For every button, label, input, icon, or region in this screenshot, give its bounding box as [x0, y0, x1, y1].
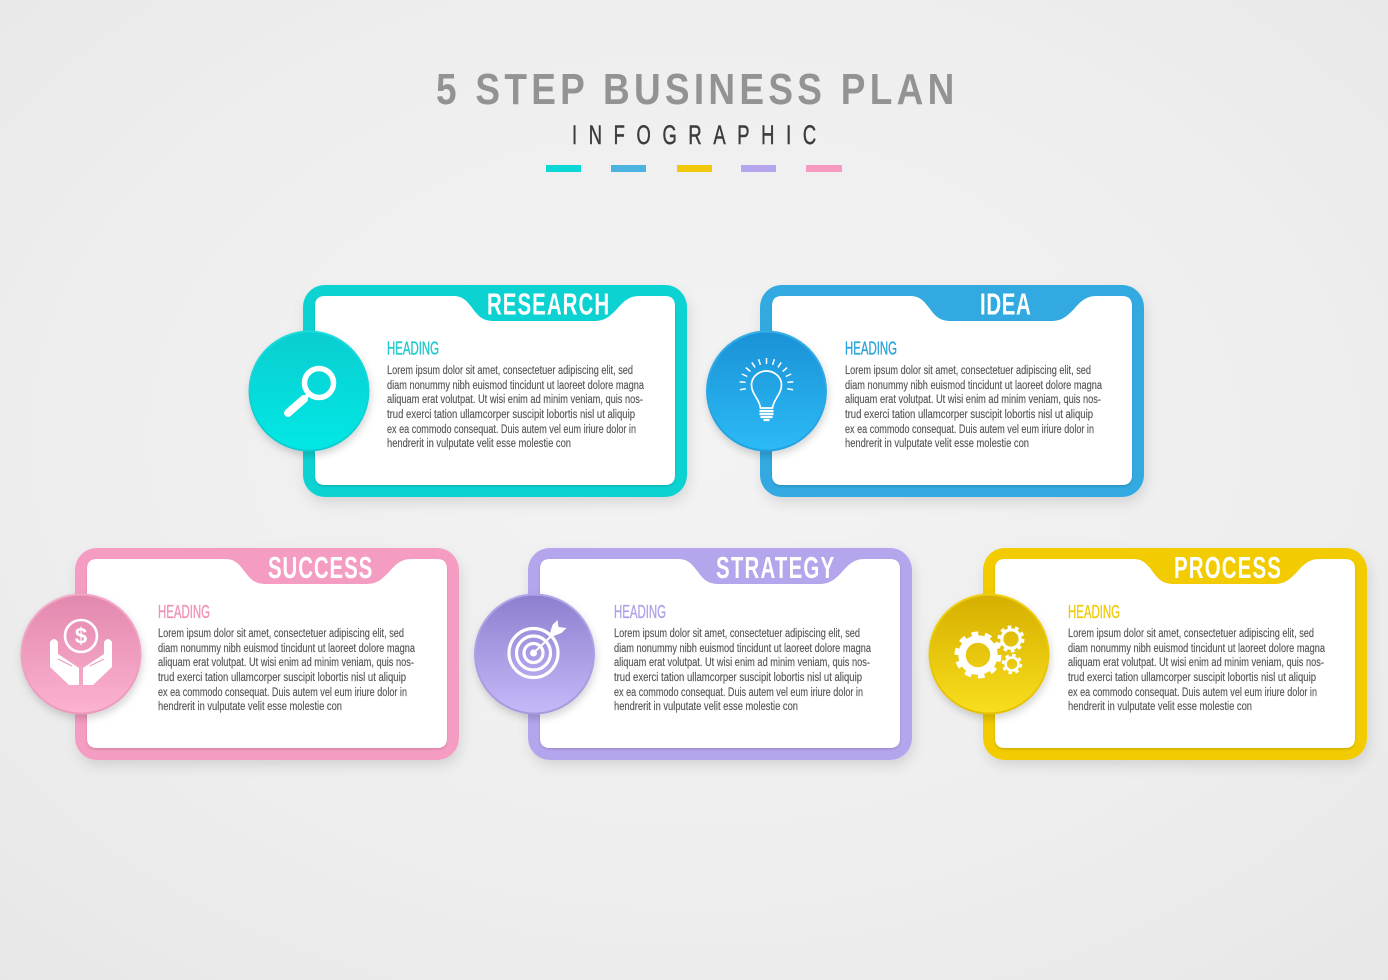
icon badge: magnifier	[248, 330, 370, 452]
icon badge: hands holding coin: $	[75, 624, 87, 648]
body text: hendrerit in vulputate velit esse molestie con	[614, 701, 798, 713]
body text: ex ea commodo consequat. Duis autem vel eum iriure dolor in	[845, 424, 1094, 436]
body text: ex ea commodo consequat. Duis autem vel eum iriure dolor in	[158, 687, 407, 699]
body text: aliquam erat volutpat. Ut wisi enim ad minim veniam, quis nos-	[614, 657, 870, 669]
heading: HEADING	[387, 338, 439, 358]
body text: Lorem ipsum dolor sit amet, consectetuer adipiscing elit, sed	[614, 628, 860, 640]
body text	[1068, 628, 1325, 713]
card frame	[983, 548, 1367, 760]
icon badge: hands holding coin	[20, 594, 142, 714]
heading: HEADING	[845, 338, 897, 358]
card white body	[772, 296, 1132, 485]
title: 5 STEP BUSINESS PLAN	[436, 64, 954, 114]
tab label: RESEARCH	[487, 286, 609, 322]
body text: trud exerci tation ullamcorper suscipit lobortis nisl ut aliquip	[845, 409, 1093, 421]
panel: success	[20, 548, 459, 760]
body text: trud exerci tation ullamcorper suscipit lobortis nisl ut aliquip	[614, 672, 862, 684]
body text: diam nonummy nibh euismod tincidunt ut laoreet dolore magna	[614, 643, 871, 655]
card frame	[75, 548, 459, 760]
card frame	[528, 548, 912, 760]
body text: Lorem ipsum dolor sit amet, consectetuer adipiscing elit, sed	[845, 365, 1091, 377]
heading: HEADING	[158, 602, 210, 622]
body text	[614, 628, 871, 713]
body text	[387, 365, 644, 450]
tab label: SUCCESS	[268, 550, 372, 585]
body text: trud exerci tation ullamcorper suscipit lobortis nisl ut aliquip	[387, 409, 635, 421]
tab label: STRATEGY	[716, 550, 835, 585]
panel: strategy	[474, 548, 912, 760]
card white body	[540, 559, 900, 748]
body text: ex ea commodo consequat. Duis autem vel eum iriure dolor in	[387, 424, 636, 436]
body text: hendrerit in vulputate velit esse molestie con	[1068, 701, 1252, 713]
card frame	[760, 285, 1144, 497]
panel: research	[248, 285, 687, 497]
panel: process	[928, 548, 1367, 760]
body text: trud exerci tation ullamcorper suscipit lobortis nisl ut aliquip	[158, 672, 406, 684]
tab label: IDEA	[980, 286, 1031, 322]
body text	[158, 628, 415, 713]
body text: aliquam erat volutpat. Ut wisi enim ad minim veniam, quis nos-	[158, 657, 414, 669]
icon badge: light bulb	[706, 330, 827, 452]
card white body	[87, 559, 447, 748]
body text: diam nonummy nibh euismod tincidunt ut laoreet dolore magna	[387, 380, 644, 392]
icon badge: gears	[928, 594, 1050, 714]
body text: aliquam erat volutpat. Ut wisi enim ad minim veniam, quis nos-	[1068, 657, 1324, 669]
card white body	[995, 559, 1355, 748]
body text: diam nonummy nibh euismod tincidunt ut laoreet dolore magna	[158, 643, 415, 655]
subtitle: INFOGRAPHIC	[572, 119, 816, 150]
body text: hendrerit in vulputate velit esse molestie con	[845, 438, 1029, 450]
body text: hendrerit in vulputate velit esse molestie con	[387, 438, 571, 450]
body text: diam nonummy nibh euismod tincidunt ut laoreet dolore magna	[845, 380, 1102, 392]
tab label: PROCESS	[1174, 550, 1281, 585]
body text: aliquam erat volutpat. Ut wisi enim ad minim veniam, quis nos-	[387, 394, 643, 406]
panel: idea	[706, 285, 1144, 497]
body text: Lorem ipsum dolor sit amet, consectetuer adipiscing elit, sed	[1068, 628, 1314, 640]
body text: aliquam erat volutpat. Ut wisi enim ad minim veniam, quis nos-	[845, 394, 1101, 406]
heading: HEADING	[1068, 602, 1120, 622]
body text	[845, 365, 1102, 450]
card white body	[315, 296, 675, 485]
body text: Lorem ipsum dolor sit amet, consectetuer adipiscing elit, sed	[158, 628, 404, 640]
card frame	[303, 285, 687, 497]
body text: ex ea commodo consequat. Duis autem vel eum iriure dolor in	[614, 687, 863, 699]
body text: trud exerci tation ullamcorper suscipit lobortis nisl ut aliquip	[1068, 672, 1316, 684]
icon badge: target	[474, 594, 595, 714]
body text: hendrerit in vulputate velit esse molestie con	[158, 701, 342, 713]
heading: HEADING	[614, 602, 666, 622]
body text: diam nonummy nibh euismod tincidunt ut laoreet dolore magna	[1068, 643, 1325, 655]
body text: ex ea commodo consequat. Duis autem vel eum iriure dolor in	[1068, 687, 1317, 699]
colour key bars	[546, 165, 842, 172]
body text: Lorem ipsum dolor sit amet, consectetuer adipiscing elit, sed	[387, 365, 633, 377]
